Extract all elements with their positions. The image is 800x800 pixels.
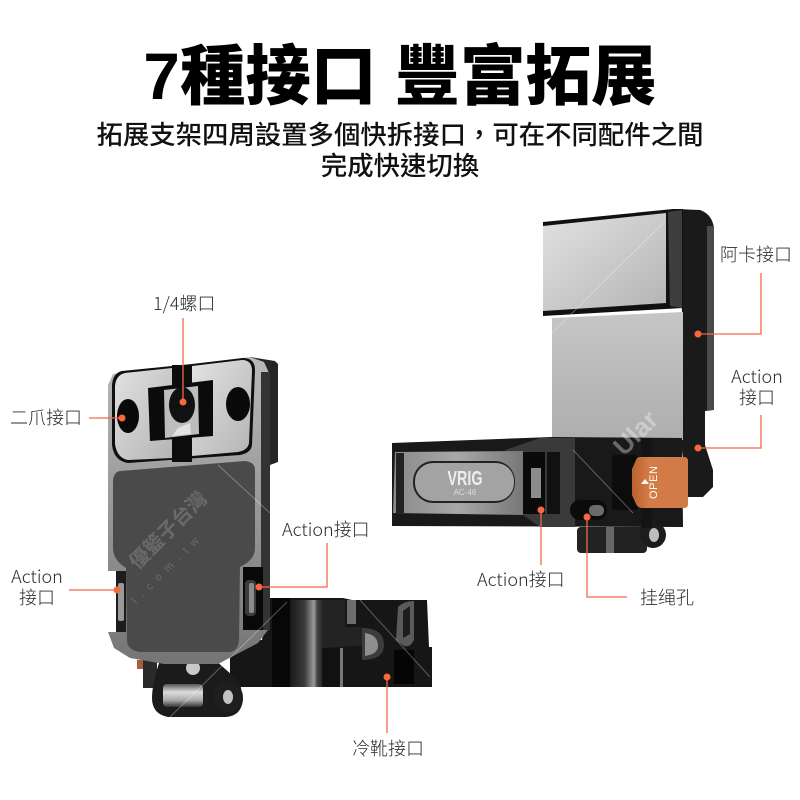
callout: left action mount: 接口 — [19, 584, 55, 610]
right device: horizontal bracket — [392, 437, 683, 527]
right device: horizontal bracket: VRIG — [448, 468, 482, 490]
callout: lanyard hole — [584, 514, 694, 610]
callout: arca mount — [694, 241, 792, 338]
right device: orange open latch: OPEN — [648, 466, 660, 499]
left device: rear rim — [250, 357, 278, 640]
left device: dark pad — [113, 461, 255, 652]
callout: top action mount: 接口 — [739, 384, 775, 410]
right device: orange open latch — [612, 438, 688, 528]
subtitle: 完成快速切換 — [321, 151, 479, 181]
watermark: Ular: Ular — [607, 404, 664, 461]
callout: arca mount: 阿卡接口 — [720, 241, 792, 267]
callout: left action mount: Action — [11, 563, 63, 589]
left device: top silver plate — [112, 358, 255, 463]
right device: lower block and ring — [577, 522, 666, 553]
left device: cold shoe mount — [230, 598, 432, 687]
subtitle: 拓展支架四周設置多個快拆接口，可在不同配件之間 — [96, 120, 703, 150]
right device: lower silver plate — [552, 312, 683, 440]
callout: cold shoe: 冷靴接口 — [352, 735, 424, 761]
callout: 1/4 screw — [153, 290, 215, 406]
callout: cold shoe — [352, 674, 424, 761]
callout: 1/4 screw: 1/4螺口 — [153, 290, 215, 316]
right device: frame edge — [707, 226, 714, 410]
watermark diagonals — [170, 223, 663, 717]
left device: action slots — [108, 567, 263, 632]
watermark on left device — [106, 486, 227, 606]
right device: rear frame — [676, 209, 714, 497]
callout: top action mount: Action — [731, 363, 783, 389]
callout: two-claw mount — [10, 404, 126, 430]
callout: lanyard hole: 挂绳孔 — [640, 584, 694, 610]
callout: left action mount — [11, 563, 120, 610]
title: 7種接口 豐富拓展 — [143, 40, 657, 113]
right device: horizontal bracket: AC-46 — [454, 488, 477, 497]
subtitle — [96, 120, 703, 181]
left device: hinge foot — [137, 660, 243, 717]
right device: lanyard hole — [570, 500, 607, 520]
callout: right action mount: Action接口 — [282, 516, 370, 542]
left device: dark side edge — [261, 372, 270, 630]
left device: main plate — [108, 357, 270, 664]
watermark on left device: 優籃子台灣 — [124, 486, 212, 574]
watermark on left device: l.com.tw — [130, 530, 206, 606]
callout: two-claw mount: 二爪接口 — [10, 404, 82, 430]
callout: top action mount — [694, 363, 783, 452]
callout: right action mount — [256, 516, 370, 590]
callout: bottom action mount — [477, 506, 565, 592]
right device: upper silver plate — [543, 209, 683, 316]
callout: bottom action mount: Action接口 — [477, 566, 565, 592]
